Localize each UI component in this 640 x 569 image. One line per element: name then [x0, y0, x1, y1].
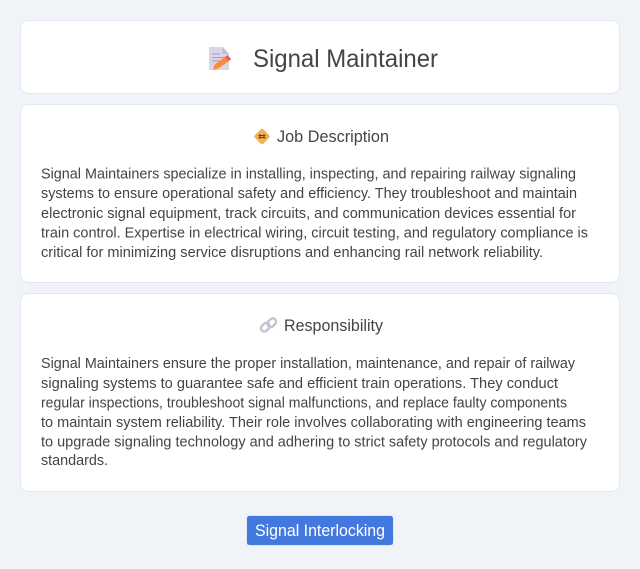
- heading: Responsibility: Responsibility: [284, 317, 384, 335]
- heading: Signal Maintainer: Signal Maintainer: [253, 45, 438, 73]
- text block: responsibility: Signal Maintainers ensure the proper installation, maintenance, and repair of railway: [41, 356, 576, 372]
- text block: job description: electronic signal equipment, track circuits, and communication devices essential for: [41, 206, 576, 222]
- text block: job description: [41, 166, 588, 261]
- text block: responsibility: regular inspections, troubleshoot signal malfunctions, and replace faulty components: [41, 396, 567, 412]
- text block: job description: train control. Expertise in electrical wiring, circuit testing, and regulatory compliance is: [41, 226, 588, 242]
- icon: orange diamond sign: [254, 128, 270, 145]
- icon: document with pencil: [209, 47, 231, 70]
- heading: Job Description: Job Description: [277, 128, 389, 146]
- text block: job description: Signal Maintainers specialize in installing, inspecting, and repairing railway signaling: [41, 166, 576, 182]
- panel: job description: [20, 104, 620, 282]
- panel: responsibility: [20, 294, 620, 492]
- text block: job description: critical for minimizing service disruptions and enhancing rail network reliability.: [41, 245, 543, 261]
- text block: responsibility: standards.: [41, 453, 108, 469]
- button: Signal Interlocking: [246, 516, 394, 546]
- text block: responsibility: [41, 356, 588, 469]
- icon: chain link: [260, 317, 277, 333]
- button: Signal Interlocking: Signal Interlocking: [255, 522, 385, 540]
- text block: responsibility: signaling systems to guarantee safe and efficient train operations. They conduct: [41, 376, 558, 392]
- text block: responsibility: to maintain system reliability. Their role involves collaborating with engineering teams: [41, 415, 586, 431]
- text block: responsibility: to upgrade signaling technology and adhering to strict safety protocols and regulatory: [41, 434, 588, 450]
- panel: title: [20, 20, 620, 94]
- text block: job description: systems to ensure operational safety and efficiency. They troubleshoot and maintain: [41, 186, 577, 202]
